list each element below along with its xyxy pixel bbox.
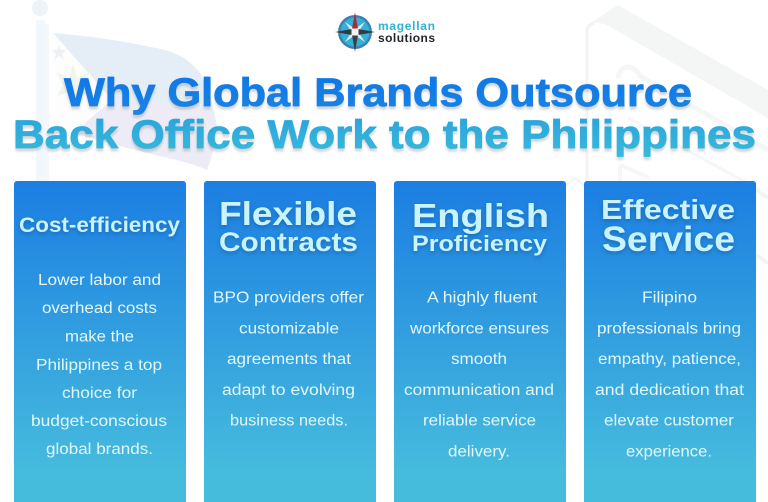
- text block: flexible contracts description: agreements that: [227, 351, 352, 368]
- panel: Flexible Contracts: [204, 181, 376, 502]
- logo text: solutions: [378, 31, 435, 45]
- text block: cost-efficiency description: make the: [65, 328, 134, 346]
- panel: Effective Service: [584, 181, 756, 502]
- text block: cost-efficiency description: [31, 272, 167, 458]
- text block: effective service description: and dedication that: [595, 382, 745, 399]
- heading: English Proficiency: English: [412, 197, 549, 234]
- text block: cost-efficiency description: choice for: [62, 385, 137, 402]
- heading: Flexible Contracts: Flexible: [219, 195, 357, 232]
- text block: effective service description: professionals bring: [597, 320, 741, 338]
- icon: compass: [335, 12, 375, 52]
- text block: english proficiency description: reliable service: [423, 412, 536, 430]
- text block: cost-efficiency description: Lower labor and: [38, 272, 161, 289]
- text block: effective service description: experience.: [626, 444, 712, 460]
- text block: english proficiency description: smooth: [451, 351, 507, 368]
- text block: english proficiency description: delivery.: [448, 444, 510, 460]
- title: [13, 71, 756, 157]
- title: Back Office Work to the Philippines: [13, 113, 756, 157]
- text block: effective service description: [595, 290, 745, 460]
- text block: cost-efficiency description: Philippines a top: [36, 357, 162, 374]
- heading: Effective Service: Service: [602, 220, 735, 259]
- logo text: magellan: [378, 19, 435, 33]
- text block: cost-efficiency description: budget-conscious: [31, 413, 167, 430]
- heading: Effective Service: [601, 194, 735, 259]
- panel: English Proficiency: [394, 181, 566, 502]
- text block: english proficiency description: communication and: [404, 382, 554, 399]
- text block: effective service description: Filipino: [642, 290, 697, 306]
- heading: Flexible Contracts: Contracts: [219, 227, 358, 257]
- text block: cost-efficiency description: global brands.: [46, 441, 153, 458]
- text block: flexible contracts description: BPO providers offer: [213, 290, 364, 306]
- text block: english proficiency description: [404, 290, 554, 460]
- heading: English Proficiency: [412, 197, 549, 256]
- heading: Effective Service: Effective: [601, 194, 735, 225]
- background: faint device outline: [566, 5, 768, 263]
- text block: english proficiency description: workforce ensures: [409, 320, 549, 338]
- text block: effective service description: elevate customer: [604, 412, 734, 430]
- logo: Magellan Solutions: [335, 12, 435, 52]
- text block: flexible contracts description: business needs.: [230, 412, 348, 430]
- background: flag and pole: [32, 0, 217, 502]
- text block: cost-efficiency description: overhead costs: [42, 300, 157, 317]
- panel: Cost-efficiency: [14, 181, 186, 502]
- heading: Cost-efficiency: Cost-efficiency: [19, 213, 180, 237]
- heading: English Proficiency: Proficiency: [412, 231, 548, 256]
- title: Why Global Brands Outsource: [64, 71, 692, 115]
- heading: Flexible Contracts: [219, 195, 358, 257]
- text block: flexible contracts description: customizable: [239, 320, 339, 338]
- text block: flexible contracts description: [213, 290, 364, 430]
- text block: effective service description: empathy, patience,: [598, 351, 741, 368]
- logo text: [378, 19, 435, 45]
- text block: english proficiency description: A highly fluent: [427, 290, 538, 306]
- text block: flexible contracts description: adapt to evolving: [222, 382, 355, 399]
